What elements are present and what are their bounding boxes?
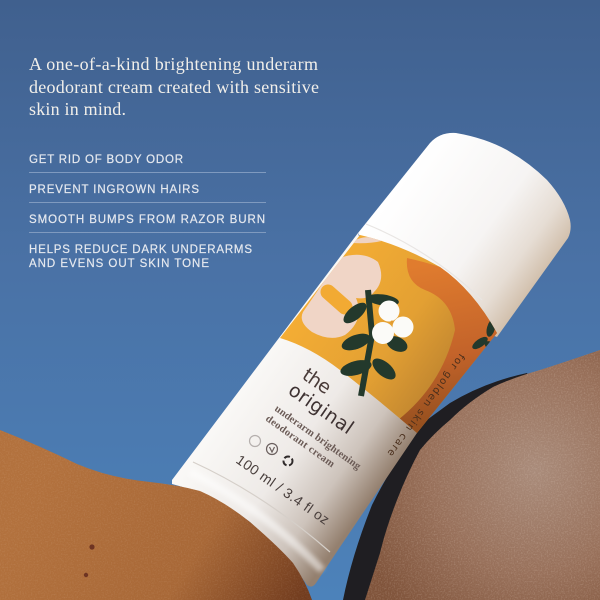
stem [361,290,372,396]
benefits list: SMOOTH BUMPS FROM RAZOR BURN [29,214,265,226]
yellow capsule [328,292,345,307]
benefits list: AND EVENS OUT SKIN TONE [29,258,209,270]
intro heading: deodorant cream created with sensitive [29,77,319,97]
dark orange wave [398,258,500,436]
product name and details [233,364,363,528]
bottle cap [358,133,571,337]
base highlight [190,472,322,570]
benefits list: HELPS REDUCE DARK UNDERARMS [29,244,252,256]
certification icons [250,436,292,466]
benefits list: GET RID OF BODY ODOR [29,154,183,166]
product name and details: 100 ml / 3.4 fl oz [233,451,333,528]
pink swirl [302,255,381,338]
flower [372,300,414,344]
benefits list [29,154,266,270]
pale top strip [352,237,385,243]
skin marks [89,544,95,550]
cap seam [366,224,482,300]
side label text: for golden skin care [385,351,466,458]
right arm [365,350,600,600]
intro heading: skin in mind. [29,99,126,119]
bottle body [172,233,417,587]
product name and details: deodorant cream [263,413,337,470]
intro heading: A one-of-a-kind brightening underarm [29,54,318,74]
left arm [0,430,312,600]
product name and details: underarm brightening [272,403,363,473]
product name and details: original [284,379,358,439]
product bottle [172,133,571,587]
benefits list: PREVENT INGROWN HAIRS [29,184,199,196]
base band [193,462,330,552]
leaves [339,292,410,383]
intro heading [29,54,319,119]
dark strap behind right arm [343,373,530,600]
leaf logo on label edge [472,321,495,350]
label orange field [280,235,497,433]
label artwork [280,235,497,433]
product name and details: the [298,364,335,399]
plant illustration [339,290,414,396]
